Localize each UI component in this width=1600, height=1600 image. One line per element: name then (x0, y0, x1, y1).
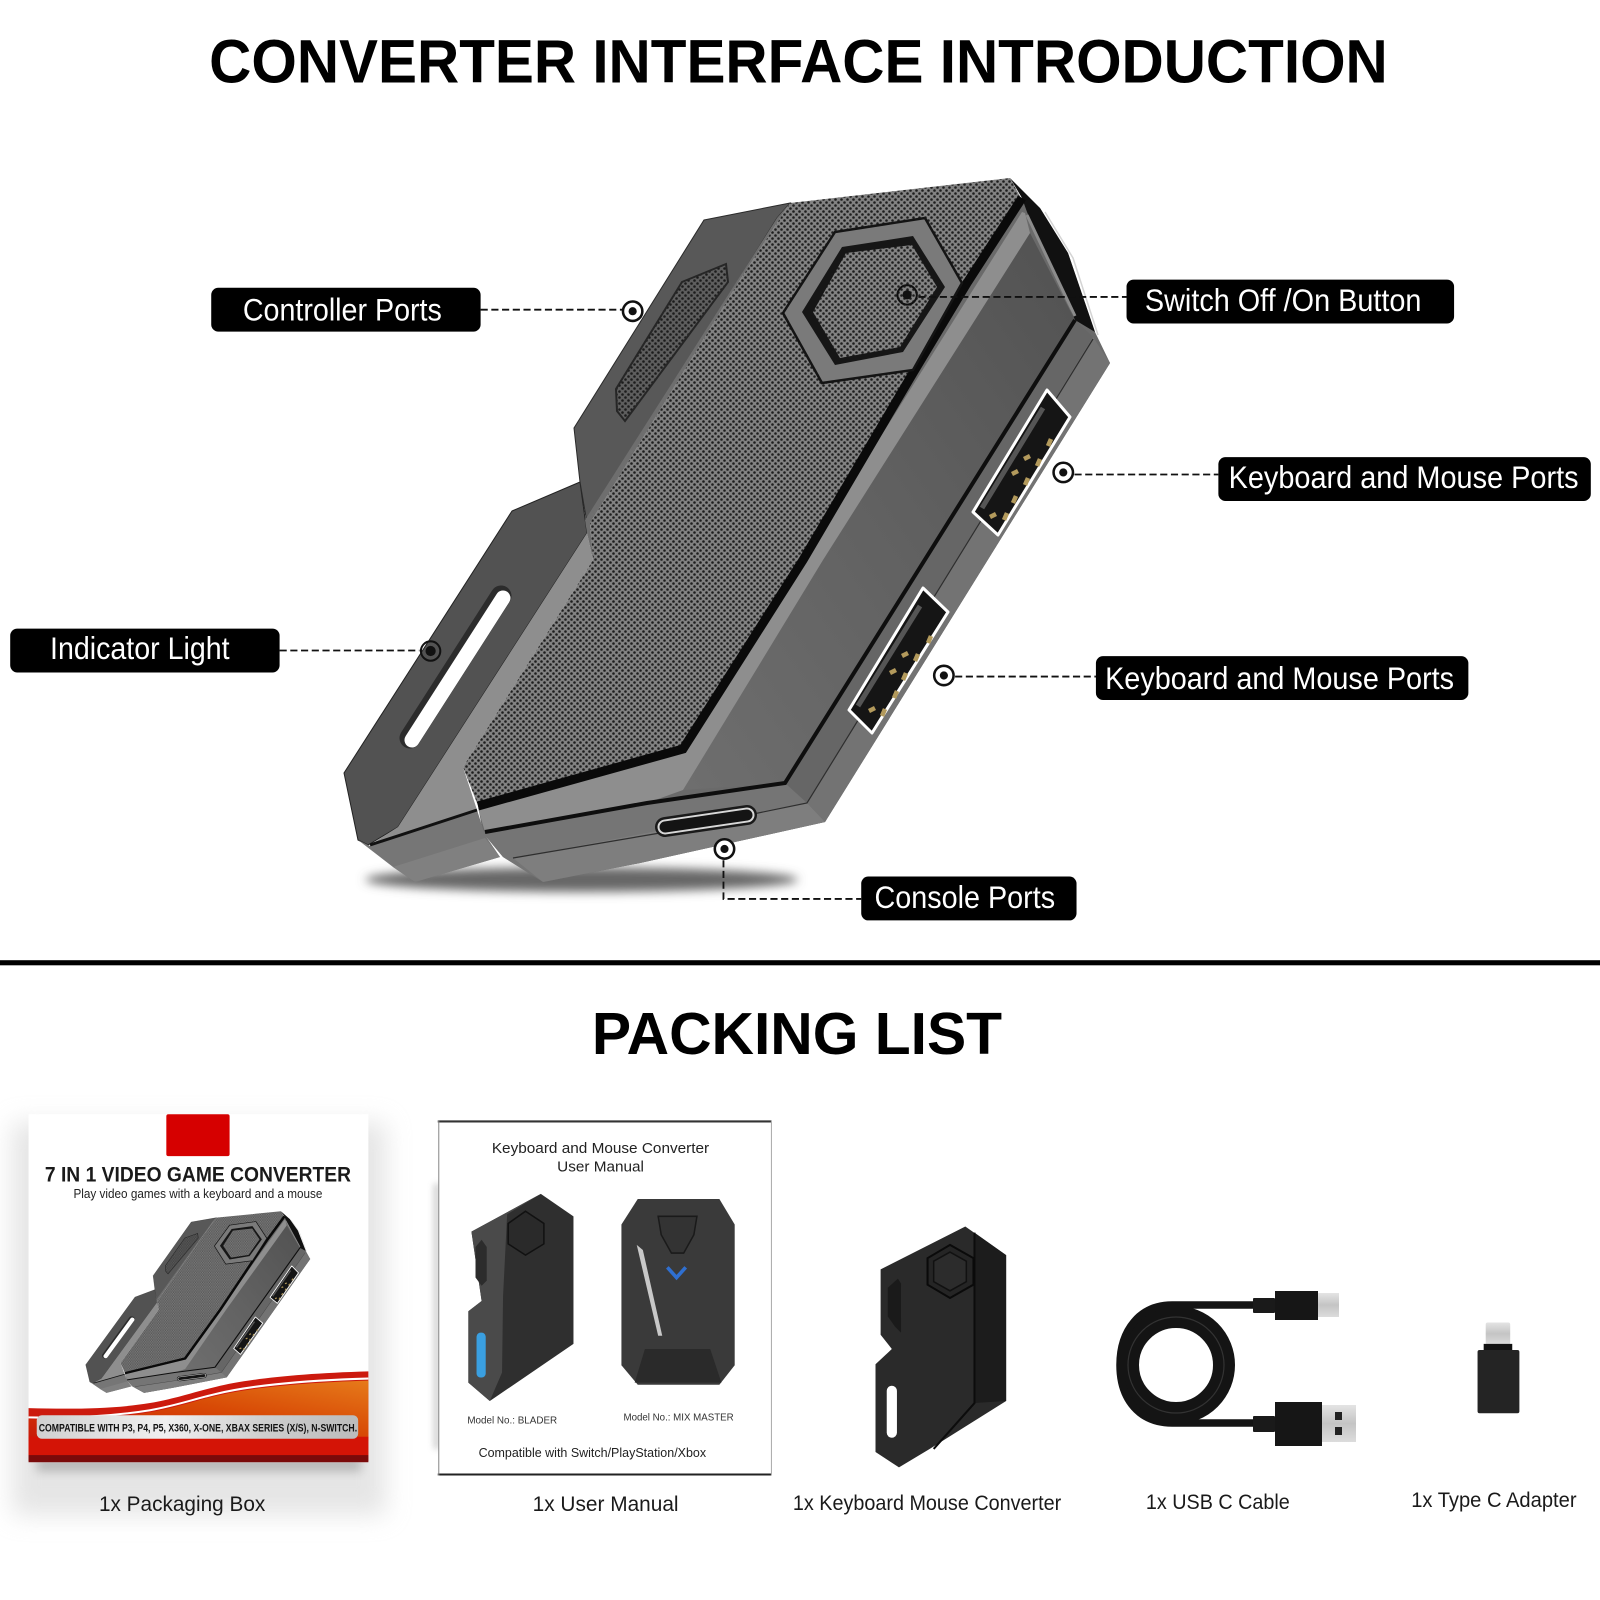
label: console ports (715, 839, 1077, 920)
red swoosh band (29, 1371, 368, 1461)
user manual (438, 1120, 771, 1476)
controller port recess (616, 264, 728, 421)
packaging box: COMPATIBLE WITH P3, P4, P5, X360, X-ONE, XBAX SERIES (X/S), N-SWITCH. (39, 1423, 357, 1435)
adapter caption: 1x Type C Adapter (1411, 1489, 1577, 1512)
cable caption: 1x USB C Cable (1146, 1491, 1290, 1514)
compatibility line: Compatible with Switch/PlayStation/Xbox (479, 1445, 707, 1460)
main converter illustration (344, 178, 1110, 882)
type c adapter (1478, 1322, 1519, 1413)
label: console ports: Console Ports (874, 879, 1055, 915)
soft backdrop behind box (12, 1122, 386, 1515)
light strip beside groove (478, 212, 1030, 832)
silver compatibility strip (37, 1415, 358, 1439)
black groove (478, 198, 1022, 806)
dotted top panel (463, 178, 1022, 803)
label: controller ports (211, 288, 642, 332)
black body line (485, 320, 1075, 832)
label: keyboard and mouse ports lower: Keyboard and Mouse Ports (1105, 660, 1454, 696)
manual caption: 1x User Manual (533, 1493, 679, 1516)
USB port 1 (973, 390, 1070, 535)
user manual: User Manual (557, 1159, 644, 1175)
label: keyboard and mouse ports lower (934, 656, 1468, 700)
lower left side (358, 810, 500, 882)
manual title: Keyboard and Mouse Converter (492, 1141, 709, 1157)
label: indicator light: Indicator Light (50, 630, 230, 666)
packaging box (29, 1114, 368, 1462)
model: blader (468, 1194, 573, 1401)
box subtitle: Play video games with a keyboard and a mouse (73, 1186, 322, 1201)
title: CONVERTER INTERFACE INTRODUCTION (209, 28, 1388, 96)
converter caption: 1x Keyboard Mouse Converter (793, 1492, 1061, 1515)
indicator plate (344, 482, 587, 845)
shadow directly under box (37, 1457, 361, 1471)
USB port 2 (849, 588, 948, 733)
thin light rim (1027, 215, 1075, 316)
converter product photo (876, 1227, 1006, 1467)
box caption: 1x Packaging Box (99, 1493, 266, 1516)
box device image (86, 1211, 310, 1393)
indicator light slot (410, 596, 501, 738)
label: controller ports: Controller Ports (243, 291, 442, 327)
box title: 7 IN 1 VIDEO GAME CONVERTER (45, 1164, 351, 1187)
red tab (166, 1114, 230, 1156)
black top right edge (1010, 178, 1095, 332)
orange swoosh (29, 1381, 368, 1441)
label: indicator light (10, 629, 440, 672)
label: keyboard and mouse ports upper (1054, 457, 1591, 501)
label: switch off/on button: Switch Off /On Button (1145, 282, 1421, 318)
controller plate (574, 203, 790, 523)
model: mix master (621, 1199, 735, 1385)
shadow under converter (365, 867, 798, 892)
model labels: Model No.: BLADER (467, 1415, 557, 1426)
usb c cable (1120, 1291, 1356, 1446)
label: switch off/on button (897, 280, 1454, 323)
sloping face (683, 233, 1075, 790)
hexagon switch button (783, 218, 962, 383)
outer right side (785, 320, 1110, 822)
USB-C console port (665, 815, 747, 827)
type-c plug (1253, 1298, 1275, 1313)
white swoosh line (29, 1379, 368, 1418)
upper bevel (585, 203, 790, 560)
shadow left of manual (434, 1184, 440, 1449)
user manual: Model No.: MIX MASTER (623, 1412, 734, 1423)
divider (0, 960, 1600, 965)
front edge (483, 783, 825, 882)
usb-a plug (1253, 1416, 1275, 1432)
right body base (478, 198, 1110, 882)
lower light bevel (370, 533, 593, 845)
heading: packing list: PACKING LIST (592, 1000, 1002, 1067)
